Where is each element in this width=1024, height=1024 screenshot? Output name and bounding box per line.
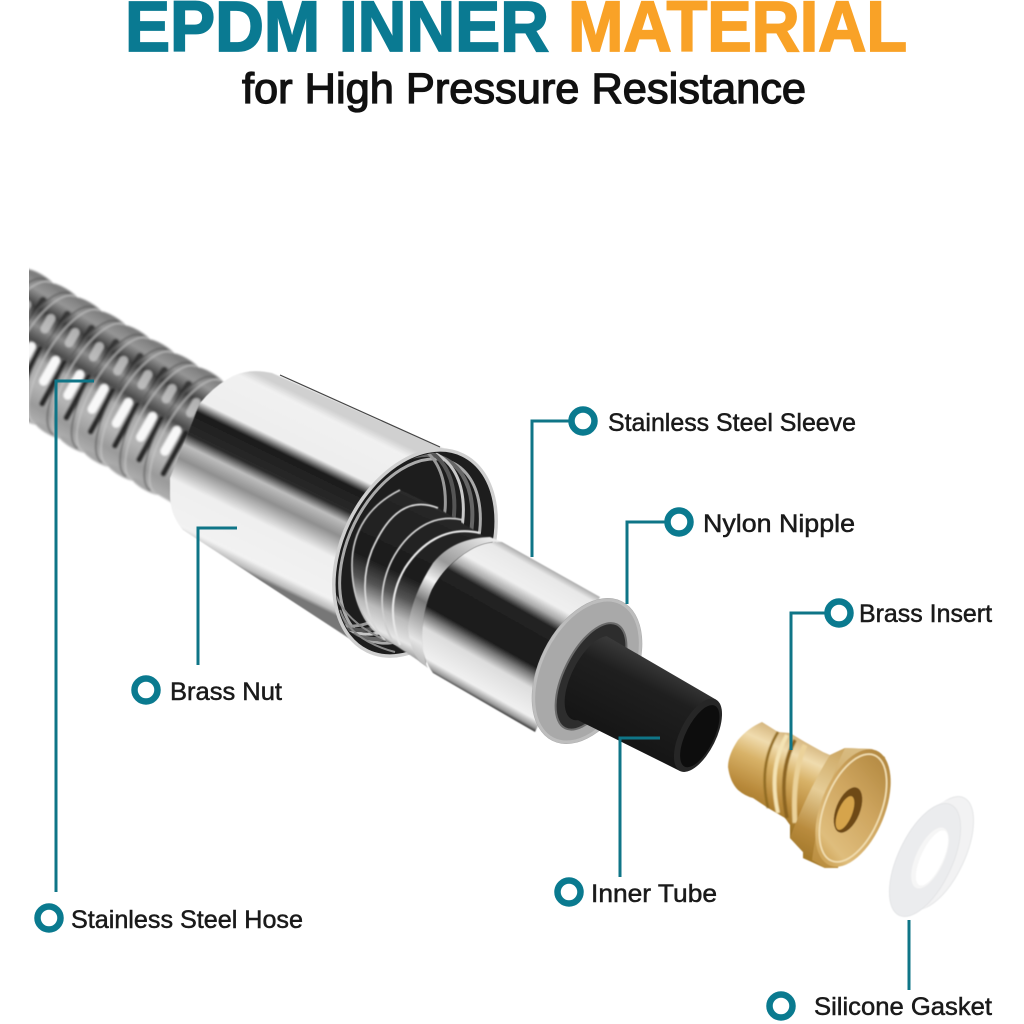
label: stainless steel hose [38, 381, 303, 934]
shoulder [790, 748, 845, 868]
label: silicone gasket [770, 920, 992, 1021]
label: nylon nipple: Nylon Nipple [703, 510, 855, 538]
stainless steel sleeve [422, 542, 600, 732]
label: brass insert: Brass Insert [859, 600, 992, 628]
inner threads [336, 452, 482, 653]
silicone gasket [875, 786, 988, 927]
label: brass nut: Brass Nut [170, 678, 282, 706]
grooves [765, 732, 805, 823]
subtitle: for High Pressure Resistance [242, 65, 806, 113]
neck collar [408, 537, 502, 668]
label: brass insert [791, 600, 992, 750]
label: stainless steel hose: Stainless Steel Hose [71, 906, 303, 934]
label: inner tube: Inner Tube [591, 880, 717, 908]
label: stainless steel sleeve [532, 409, 856, 557]
nylon nipple ring [509, 580, 665, 762]
brass insert [728, 722, 906, 877]
black tube body [553, 629, 719, 773]
inner tube [509, 580, 752, 806]
label: nylon nipple [627, 510, 855, 604]
corrugated neck [352, 490, 502, 668]
label: silicone gasket: Silicone Gasket [814, 993, 992, 1021]
stainless steel hose [29, 268, 224, 503]
label: inner tube [558, 738, 717, 908]
tube end [664, 691, 732, 779]
flange face [800, 739, 906, 877]
title [125, 0, 907, 67]
label: stainless steel sleeve: Stainless Steel Sleeve [608, 409, 856, 437]
brass nut [170, 370, 498, 658]
flange side [812, 748, 872, 868]
label: brass nut [134, 528, 282, 706]
nut opening [302, 423, 528, 683]
bore [828, 783, 868, 837]
